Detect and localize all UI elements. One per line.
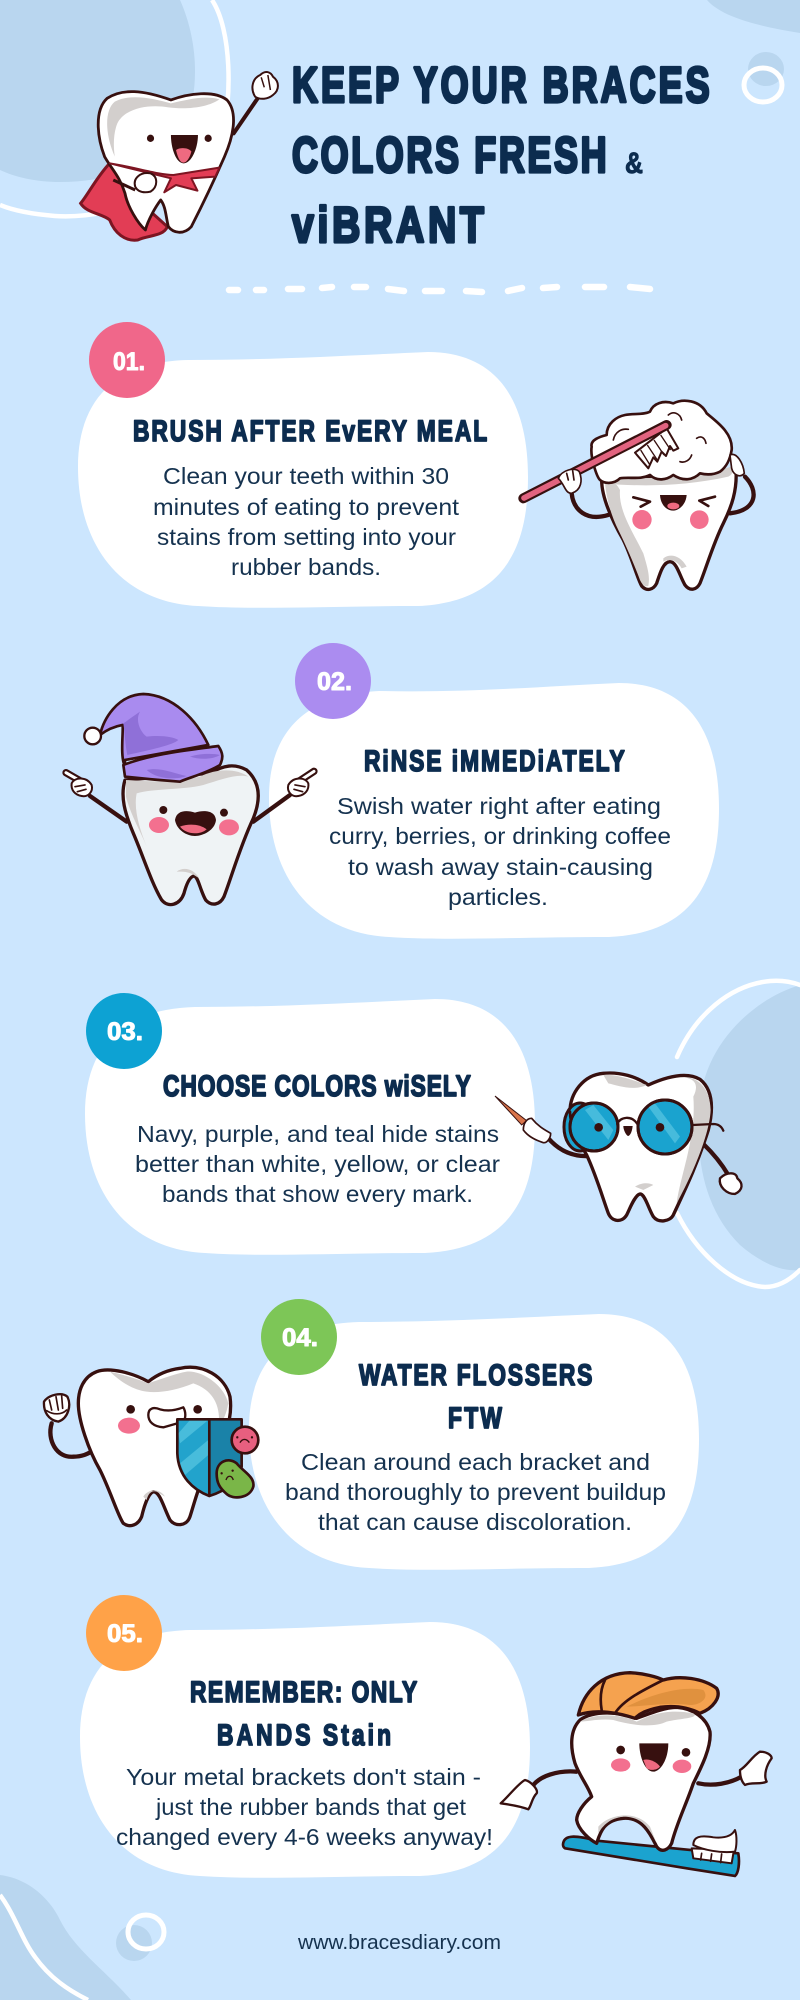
icon: tooth with shield and germs [44, 1367, 258, 1526]
heading: step 3: CHOOSE COLORS wiSELY [163, 1069, 471, 1103]
text: step 3: Navy, purple, and teal hide stains [137, 1121, 499, 1147]
background blob: bottom left [0, 1875, 131, 2000]
badge: 05 [86, 1595, 162, 1671]
badge: 02: 02. [317, 668, 352, 696]
text: step 2: to wash away stain-causing [348, 854, 653, 880]
background ring: top right [744, 52, 784, 102]
background blob: top right [707, 0, 800, 33]
heading: step 4: FTW [448, 1401, 503, 1435]
footer website: www.bracesdiary.com [297, 1932, 501, 1954]
heading: step 5: REMEMBER: ONLY [190, 1675, 417, 1709]
heading: step 1: BRUSH AFTER EvERY MEAL [133, 414, 487, 448]
text: step 2: Swish water right after eating [337, 793, 661, 819]
text: step 5 [116, 1764, 493, 1850]
text: step 1: stains from setting into your [157, 524, 456, 550]
badge: 04: 04. [282, 1324, 318, 1352]
panel: step 4 [249, 1299, 699, 1570]
title: KEEP YOUR BRACES [292, 58, 710, 113]
icon: tooth with round blue glasses [495, 1073, 742, 1221]
panel: step 5 [80, 1595, 530, 1878]
panel: step 1 [78, 322, 528, 608]
heading: step 5: BANDS Stain [217, 1718, 391, 1752]
badge: 02 [295, 643, 371, 719]
text: step 2: particles. [448, 884, 548, 910]
text: step 1: rubber bands. [231, 554, 381, 580]
title: COLORS FRESH [292, 128, 607, 183]
icon: tooth brushing with foam [523, 401, 754, 589]
heading: step 4: WATER FLOSSERS [359, 1358, 592, 1392]
text: step 3: better than white, yellow, or clear [135, 1151, 500, 1177]
title [292, 58, 710, 253]
text: step 5: just the rubber bands that get [155, 1794, 467, 1820]
badge: 04 [261, 1299, 337, 1375]
text: step 4: that can cause discoloration. [318, 1509, 632, 1535]
background blob: top left [0, 0, 229, 216]
badge: 03: 03. [107, 1018, 143, 1046]
text: step 3: bands that show every mark. [162, 1181, 473, 1207]
heading: step 2: RiNSE iMMEDiATELY [364, 744, 625, 778]
text: step 1: Clean your teeth within 30 [163, 463, 449, 489]
text: step 2 [329, 793, 671, 910]
panel: step 3 [85, 993, 535, 1255]
heading: step 5 [190, 1675, 417, 1752]
badge: 01: 01. [113, 348, 145, 376]
badge: 01 [89, 322, 165, 398]
text: step 1 [153, 463, 460, 580]
background blob: middle right [677, 981, 800, 1287]
icon: tooth with purple sleep hat [66, 694, 314, 905]
text: step 3 [135, 1121, 500, 1207]
text: step 4: band thoroughly to prevent buildup [285, 1479, 666, 1505]
badge: 03 [86, 993, 162, 1069]
text: step 5: Your metal brackets don't stain - [126, 1764, 481, 1790]
text: step 4: Clean around each bracket and [301, 1449, 650, 1475]
text: step 4 [285, 1449, 666, 1535]
text: step 5: changed every 4-6 weeks anyway! [116, 1824, 493, 1850]
badge: 05: 05. [107, 1620, 143, 1648]
background ring: bottom left [116, 1915, 164, 1961]
icon: superhero tooth [81, 72, 278, 240]
title: viBRANT [292, 196, 484, 253]
text: step 1: minutes of eating to prevent [153, 494, 460, 520]
icon: tooth skating on toothbrush with cap [501, 1673, 772, 1876]
text: step 2: curry, berries, or drinking coffee [329, 823, 671, 849]
heading: step 4 [359, 1358, 592, 1435]
title: & [625, 147, 643, 180]
panel: step 2 [269, 643, 719, 939]
